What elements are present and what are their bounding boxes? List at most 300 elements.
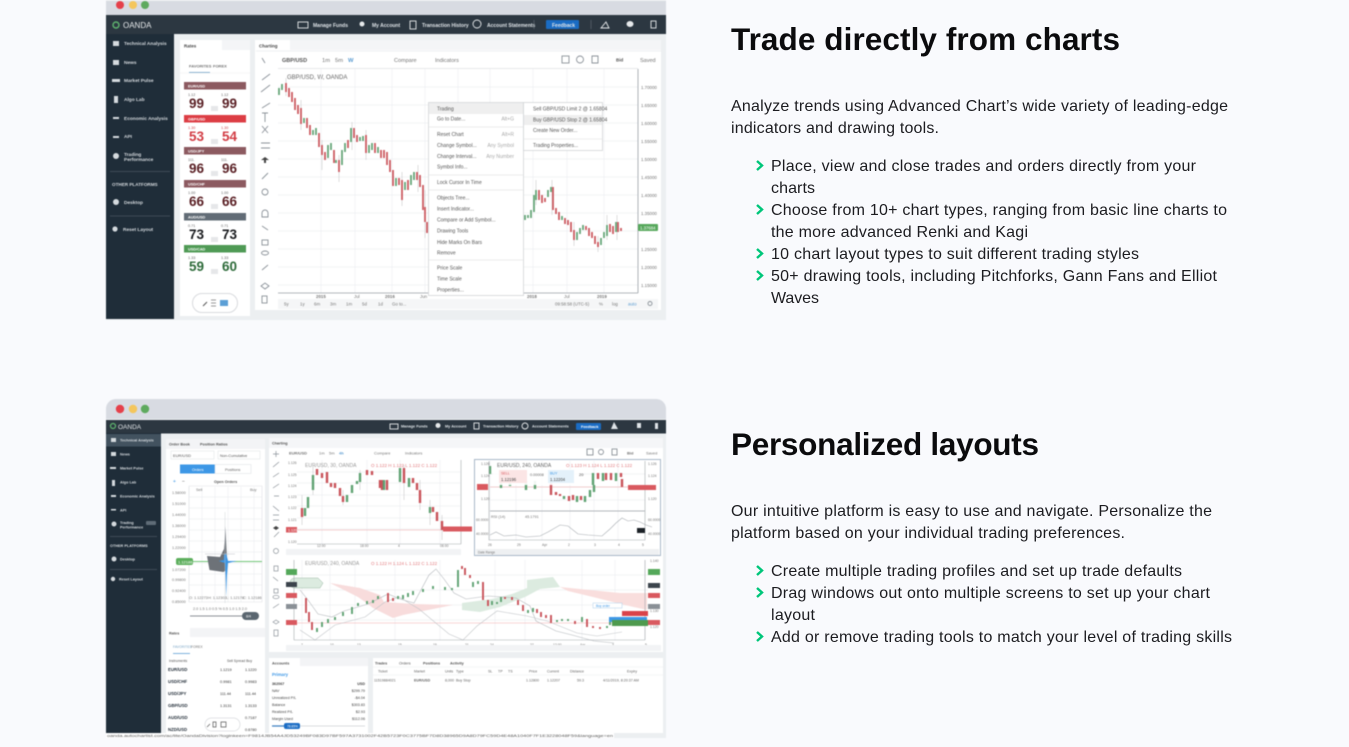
chart context menu: Properties... [437,288,464,294]
rate cards: AUD/USD [188,216,206,220]
trades table panel: EUR/USD [414,678,431,682]
chart: EUR/USD 30 minute: 4 [398,544,400,548]
rates list panel: NZD/USD [168,727,187,732]
accounts panel: Unrealized P/L [272,696,296,700]
rates panel: 1.00 [188,191,195,195]
sidebar navigation: Economic Analysis [120,494,155,498]
sidebar navigation: Technical Analysis [124,41,167,47]
accounts panel: Balance [272,703,285,707]
rate cards: USD/CAD [188,248,206,252]
chart context menu: Change Interval... [437,154,476,160]
chart: EUR/USD 240 with order ticket and RSI pane: 29 [517,543,521,547]
sidebar navigation: Reset Layout [123,227,154,233]
trades table panel: Distance [570,670,584,674]
candlestick chart: GBP/USD weekly: 1.60000 [641,121,657,126]
bullet list: Place, view and close trades and orders directly from your [771,158,1197,175]
chart toolbar: 1m [319,450,325,456]
sidebar navigation [106,433,161,733]
order book panel: Open Orders [214,480,237,484]
browser status bar URL [106,733,614,738]
trades table panel: Price [529,670,537,674]
chart context menu [428,102,524,296]
candlestick chart: GBP/USD weekly: 1.40000 [641,193,657,198]
accounts panel: -$4.04 [355,696,365,700]
sidebar navigation: Performance [120,526,143,530]
chart: EUR/USD 30 minute: 1.121 [288,518,297,522]
layout pill [205,718,240,731]
candlestick chart: GBP/USD weekly: 2018 [527,294,537,299]
chart: EUR/USD 240 with Ichimoku cloud: O 1.122 H 1.124 L 1.122 C 1.122 [371,561,438,566]
accounts panel: USD [357,682,365,686]
order book depth chart: 0.92400 [172,589,186,593]
chart: EUR/USD 30 minute: 1.120 [288,540,297,544]
order book depth chart: O: 1.12273 [189,596,208,600]
rates list panel: Rates [169,632,179,636]
chart: EUR/USD 240 with Ichimoku cloud: 12:00 [553,643,562,647]
chart bottom bar: 1m [346,302,352,306]
chart toolbar: Bid [627,450,634,456]
trades table panel: Activity [450,662,465,666]
order book panel: + [173,479,176,485]
heading: Trade directly from charts [731,21,1120,57]
accounts panel: Margin Used [272,717,293,721]
chart: EUR/USD 240 with Ichimoku cloud: 27 [530,643,534,647]
sidebar navigation: Market Pulse [124,78,154,84]
chart bottom bar [278,299,658,309]
ichimoku clouds [330,583,453,618]
chart: EUR/USD 30 minute: 1.122 [288,506,297,510]
order book depth chart [172,486,262,611]
chart: EUR/USD 240 with Ichimoku cloud: 13 [357,643,361,647]
rates panel: 99 [222,96,237,111]
sidebar navigation: Desktop [124,200,143,206]
chart toolbar: 5m [335,58,343,64]
rates panel: 73 [189,227,205,242]
chart: EUR/USD 240 with Ichimoku cloud: 7 [301,643,303,647]
chart: EUR/USD 240 with Ichimoku cloud: 10 [330,643,334,647]
candlestick chart: GBP/USD weekly: 1.20000 [641,265,657,270]
chart: EUR/USD 240 with order ticket and RSI pane: 40.0000 [648,532,660,536]
rates panel: 53 [189,129,205,144]
chart context menu: Hide Marks On Bars [437,240,483,246]
trades table panel: Buy Stop [456,678,471,682]
sidebar navigation: Algo Lab [120,480,137,484]
sidebar navigation: News [124,60,137,66]
accounts panel: Accounts [272,662,289,666]
candlestick chart: GBP/USD weekly: 1.55000 [641,139,657,144]
trades table panel: Ticket [378,670,387,674]
trading submenu: Create New Order... [533,128,577,134]
rates list panel: Instruments [169,659,188,663]
top navigation bar: Manage Funds [401,424,428,428]
rates panel: 96 [189,161,205,176]
charting panel [255,40,661,310]
open order tags: Buy order [596,604,611,608]
chart toolbar: Saved [640,58,656,64]
rates panel: 0.71 [221,224,228,228]
accounts panel [269,658,368,733]
chart: EUR/USD 240 with order ticket and RSI pane: Apr [542,543,548,547]
rates list panel: 0.6780 [245,728,257,732]
bullet list: 10 chart layout types to suit different trading styles [771,246,1139,263]
chart bottom bar: 6m [314,302,320,306]
order book panel: − [182,479,185,485]
chart bottom bar: 09:58:58 (UTC-5) [555,302,590,306]
order book depth chart: Buy [250,488,257,492]
rates list panel: 1.1220 [245,668,257,672]
order book depth chart: Sell [196,488,202,492]
candlestick chart: GBP/USD weekly [278,69,658,299]
top navigation bar: Manage Funds [313,23,348,29]
chart toolbar: Indicators [405,450,422,456]
chart context menu: Insert Indicator... [437,206,474,212]
accounts panel: $2.93 [356,710,365,714]
rate cards: USD/JPY [188,150,205,154]
chart: EUR/USD 240 with Ichimoku cloud: Apr [580,643,586,647]
chart: EUR/USD 30 minute: 1.120 [288,528,297,532]
rates list panel: 0.9983 [245,680,257,684]
candlestick chart: GBP/USD weekly: 1.25000 [641,247,657,252]
accounts panel: $112.06 [352,717,365,721]
chart bottom bar: % [599,302,603,306]
trades table panel: Type [456,670,464,674]
chart: EUR/USD 30 minute: 12:00 [317,544,326,548]
screenshot: trading platform with chart and context menu [105,0,667,320]
rates list panel: FAVORITES [173,645,193,649]
chart: EUR/USD 240 with order ticket and RSI pane: 2 [568,543,570,547]
rates panel: 1.12 [188,93,195,97]
rates panel: 1.30 [221,126,228,130]
bullet list: the more advanced Renki and Kagi [771,224,1028,241]
candlestick chart: GBP/USD weekly: Jun [420,294,428,299]
order book depth chart: 1.12186 [178,560,193,564]
screenshot: personalized multi-panel layout [105,398,667,738]
chart: EUR/USD 30 minute: 1.123 [288,495,297,499]
sidebar navigation: Trading [124,152,141,158]
candlestick chart: GBP/USD weekly: 2015 [316,294,326,299]
accounts panel: 78.85% [287,724,298,728]
intro paragraph: platform based on your individual trading preferences. [731,525,1125,542]
chart: EUR/USD 240 with Ichimoku cloud: 24 [490,643,494,647]
chart: EUR/USD 240 with order ticket and RSI pane: 3 [594,543,596,547]
trades table panel: 1.12800 [526,678,539,682]
sidebar navigation: Performance [124,157,154,163]
chart: EUR/USD 30 minute: 1.126 [288,461,297,465]
order book panel: Positions [225,468,241,472]
order book depth chart: 0.85000 [172,600,186,604]
trades table panel: 4/11/2019, 8:20:37 AM [603,678,639,682]
candlestick chart: GBP/USD weekly: 1.65000 [641,103,657,108]
chart: EUR/USD 240 with Ichimoku cloud: 21 [465,643,469,647]
chart context menu: Alt+G [501,116,514,122]
order book depth chart: 1.07200 [172,568,186,572]
trades table panel [373,658,663,733]
candlestick chart: GBP/USD weekly: Jul [354,294,360,299]
rates panel: 66 [189,194,205,209]
order book panel [166,439,265,629]
order book panel: EUR/USD [173,453,191,458]
rates panel: FOREX [213,64,227,68]
intro paragraph: indicators and drawing tools. [731,120,939,137]
accounts panel: 362067 [272,682,284,686]
intro paragraph: Analyze trends using Advanced Chart’s wide variety of leading-edge [731,98,1228,115]
sidebar navigation: OTHER PLATFORMS [110,544,148,548]
trading submenu [524,102,608,150]
chart toolbar: Indicators [435,58,459,64]
chart toolbar [256,51,661,68]
order ticket overlay: 20 [579,472,584,477]
chart context menu: Reset Chart [437,132,464,138]
trades table panel: 8,000 [445,678,454,682]
rates panel: 66 [222,194,238,209]
accounts panel: $303.83 [352,703,365,707]
rates panel: 73 [222,227,238,242]
chart: EUR/USD 240 with order ticket and RSI pane: 1.120 [648,497,657,501]
chart bottom bar: 1y [300,302,305,306]
rates list panel: AUD/USD [168,715,188,720]
chart toolbar: Compare [394,58,417,64]
chart context menu: Price Scale [437,266,463,272]
rates list panel: 0.7187 [245,716,257,720]
top navigation bar: Account Statements [532,424,569,428]
order book depth chart: 1.22000 [172,546,186,550]
accounts panel: $299.79 [352,689,365,693]
chart: EUR/USD 240 with order ticket and RSI pane: 1.126 [481,462,490,466]
order book depth chart: H: 1.12302 [208,596,227,600]
order book depth chart: 1.51000 [172,502,186,506]
chart bottom bar: 3m [330,302,336,306]
trades table panel: SL [488,670,492,674]
candlestick chart: GBP/USD weekly: 1.37684 [640,226,656,230]
chart: EUR/USD 240 with order ticket and RSI pane: 1.124 [481,474,490,478]
rates panel: 1.33 [221,256,228,260]
rates list panel: Sell Spread Buy [227,659,252,663]
candlestick chart: GBP/USD weekly: 1.50000 [641,157,657,162]
order ticket overlay: 1.12204 [550,477,566,482]
top navigation bar: Transaction History [422,23,469,29]
sidebar navigation: Economic Analysis [124,116,168,122]
chart: EUR/USD 240 with order ticket and RSI pane: O 1.123 H 1.124 L 1.122 C 1.122 [566,463,633,468]
rates panel: 1.12 [221,93,228,97]
chart bottom bar: 5y [284,302,289,306]
rates list panel: USD/JPY [168,691,187,696]
bullet list: Create multiple trading profiles and set up trade defaults [771,563,1182,580]
top navigation bar: Transaction History [483,424,519,428]
chart: EUR/USD 240 with order ticket and RSI pane: 45.1791 [525,515,539,519]
intro paragraph [731,503,1212,542]
chart: EUR/USD 240 with order ticket and RSI pane: 1.126 [648,462,657,466]
bullet list: layout [771,607,816,624]
chart: EUR/USD 240 with Ichimoku cloud [286,557,661,651]
chart context menu: Symbol Info... [437,164,468,170]
rate cards: GBP/USD [188,118,206,122]
chart: EUR/USD 30 minute: 06:00 [440,544,449,548]
trades table panel: Units [445,670,453,674]
order book depth chart: 1.58000 [172,491,186,495]
chart bottom bar: 1d [378,302,383,306]
chart toolbar: 5m [329,450,335,456]
candlestick chart: GBP/USD weekly: 2016 [385,294,395,299]
chart: EUR/USD 240 with order ticket and RSI pane: RSI (14) [491,515,506,519]
top navigation bar: Feedback [581,425,599,429]
accounts panel: Primary [272,672,289,677]
rates list panel: FOREX [191,645,203,649]
rates panel: 1.30 [188,126,195,130]
chart toolbar [289,449,657,456]
sidebar navigation: API [124,134,133,140]
trades table panel: Trades [375,662,387,666]
chart context menu: Go to Date... [437,116,465,122]
top navigation bar: My Account [372,23,400,29]
candlestick chart: GBP/USD weekly: 1.70000 [641,85,657,90]
order book depth chart: 1.36000 [172,524,186,528]
trading submenu: Buy GBP/USD Stop 2 @ 1.65804 [533,118,608,124]
rates list panel: 1.3131 [220,704,232,708]
window title bar [106,1,666,15]
intro paragraph: Our intuitive platform is easy to use and navigate. Personalize the [731,503,1212,520]
chart: EUR/USD 240 with Ichimoku cloud: EUR/USD, 240, OANDA [305,561,360,567]
rates panel: 54 [222,129,238,144]
chart context menu: Any Number [486,154,514,160]
top navigation bar: Feedback [552,23,575,29]
order book depth chart: C: 1.12186 [243,596,262,600]
rates panel: 59 [189,259,204,274]
sidebar navigation [106,34,174,319]
sidebar navigation: Trading [120,521,134,525]
chart: EUR/USD 30 minute: 1.125 [288,473,297,477]
chart: EUR/USD 30 minute: 1.124 [288,484,297,488]
top navigation bar: My Account [445,424,467,428]
chart: EUR/USD 240 with Ichimoku cloud: 1.120 [650,625,659,629]
chart context menu: Trading [437,106,454,112]
rate cards: USD/CHF [188,182,206,186]
order book depth chart: 2.0 1.5 1.0 0.5 % 0.5 1.0 1.5 2.0 [193,607,247,611]
rates panel: 0.71 [188,224,195,228]
rates panel: 1.33 [188,256,195,260]
accounts panel: NAV [272,689,280,693]
order book panel: Non-Cumulative [220,454,247,458]
chart: EUR/USD 240 with order ticket and RSI pane: 26 [488,543,492,547]
candlestick chart: GBP/USD weekly: 2019 [597,294,607,299]
chart context menu: Remove [437,250,456,256]
chart: EUR/USD 240 with order ticket and RSI pane [474,460,660,556]
order ticket overlay: 1.12196 [501,477,517,482]
chart: EUR/USD 30 minute: 18:00 [360,544,369,548]
drawing tools column [273,451,279,636]
chart bottom bar: auto [628,302,637,306]
chart: EUR/USD 240 with order ticket and RSI pane: 60.0000 [648,518,660,522]
sidebar navigation: News [120,452,130,456]
order book panel: Order Book [169,442,191,446]
multi-chart panel [269,438,663,652]
sidebar navigation: API [120,508,126,512]
trading submenu: Sell GBP/USD Limit 2 @ 1.65804 [533,106,607,112]
chart: EUR/USD 240 with order ticket and RSI pane: Date Range [478,550,495,554]
heading: Personalized layouts [731,426,1039,462]
chart: EUR/USD 240 with Ichimoku cloud: 15 [398,643,402,647]
chart bottom bar: Go to... [392,302,406,306]
rates panel: 111. [221,158,228,162]
multi-chart panel: Charting [272,442,288,446]
chart: EUR/USD 240 with Ichimoku cloud: 1.130 [650,609,659,613]
trading submenu: Trading Properties... [533,143,578,149]
trades table panel: 59.3 [577,678,584,682]
order ticket overlay: BUY [550,472,558,476]
chart: EUR/USD 30 minute [286,460,472,555]
trades table panel: TS [508,670,513,674]
trades table panel: 11519884021 [374,678,396,682]
rates list panel: 1.3133 [245,704,257,708]
charting panel: Charting [259,44,278,48]
rates list panel: EUR/USD [168,667,187,672]
top navigation bar [106,15,666,34]
rates panel: 96 [222,161,238,176]
chart context menu: Any Symbol [487,143,514,149]
chart: EUR/USD 240 with Ichimoku cloud: 1.140 [650,559,659,563]
order book panel: 8/4 [246,614,251,618]
trades table panel: Market [414,670,425,674]
order ticket overlay [493,469,584,485]
chart toolbar: GBP/USD [282,58,307,64]
sidebar navigation: OTHER PLATFORMS [112,182,158,187]
bullet list: charts [771,180,815,197]
top navigation bar [106,420,666,434]
top navigation bar: OANDA [118,424,142,431]
drawing tools column [261,58,270,303]
sidebar navigation: Algo Lab [124,97,145,103]
chart: EUR/USD 30 minute: O 1.122 H 1.122 L 1.122 C 1.122 [371,463,438,468]
chart: EUR/USD 30 minute: EUR/USD, 30, OANDA [305,463,357,469]
rates panel: FAVORITES [189,64,212,68]
sidebar navigation: Reset Layout [119,578,144,582]
chart context menu: Change Symbol... [437,143,477,149]
open order tags [593,603,648,626]
layout pill [192,294,238,312]
chart toolbar: W [348,58,354,64]
chart: EUR/USD 240 with order ticket and RSI pane: 4 [618,543,620,547]
chart: EUR/USD 240 with order ticket and RSI pane: 1.120 [481,497,490,501]
order book panel: Position Ratios [200,442,228,446]
order book panel: Orders [192,468,204,472]
bullet list: 50+ drawing tools, including Pitchforks, Gann Fans and Elliot [771,268,1218,285]
bullet list: Drag windows out onto multiple screens to set up your chart [771,585,1211,602]
candlestick chart: GBP/USD weekly: 1.35000 [641,211,657,216]
chart context menu: Time Scale [437,276,462,282]
candlestick chart: GBP/USD weekly: 1.45000 [641,175,657,180]
sidebar navigation: Desktop [120,558,136,562]
rates list panel: 0.9981 [220,680,232,684]
rates list panel: 1.1219 [220,668,232,672]
trades table panel: Orders [399,662,411,666]
rates list panel: 111.44 [245,692,256,696]
chart bottom bar: 5d [362,302,367,306]
rates panel: 111. [188,158,195,162]
chart context menu: Alt+R [502,132,514,138]
order book depth chart: 1.44000 [172,513,186,517]
chart toolbar: 1m [322,58,330,64]
chart toolbar: Bid [616,58,624,62]
bullet list: Choose from 10+ chart types, ranging from basic line charts to [771,202,1227,219]
order ticket overlay: 0.00008 [530,473,544,477]
bullet list [757,563,1232,646]
chart: EUR/USD 240 with Ichimoku cloud: 19 [433,643,437,647]
chart toolbar: EUR/USD [289,450,307,456]
trades table panel: Expiry [627,670,637,674]
accounts panel: Realized P/L [272,710,293,714]
rates list panel: USD/CHF [168,679,187,684]
order ticket overlay: SELL [501,472,510,476]
rates list panel: GBP/USD [168,703,188,708]
